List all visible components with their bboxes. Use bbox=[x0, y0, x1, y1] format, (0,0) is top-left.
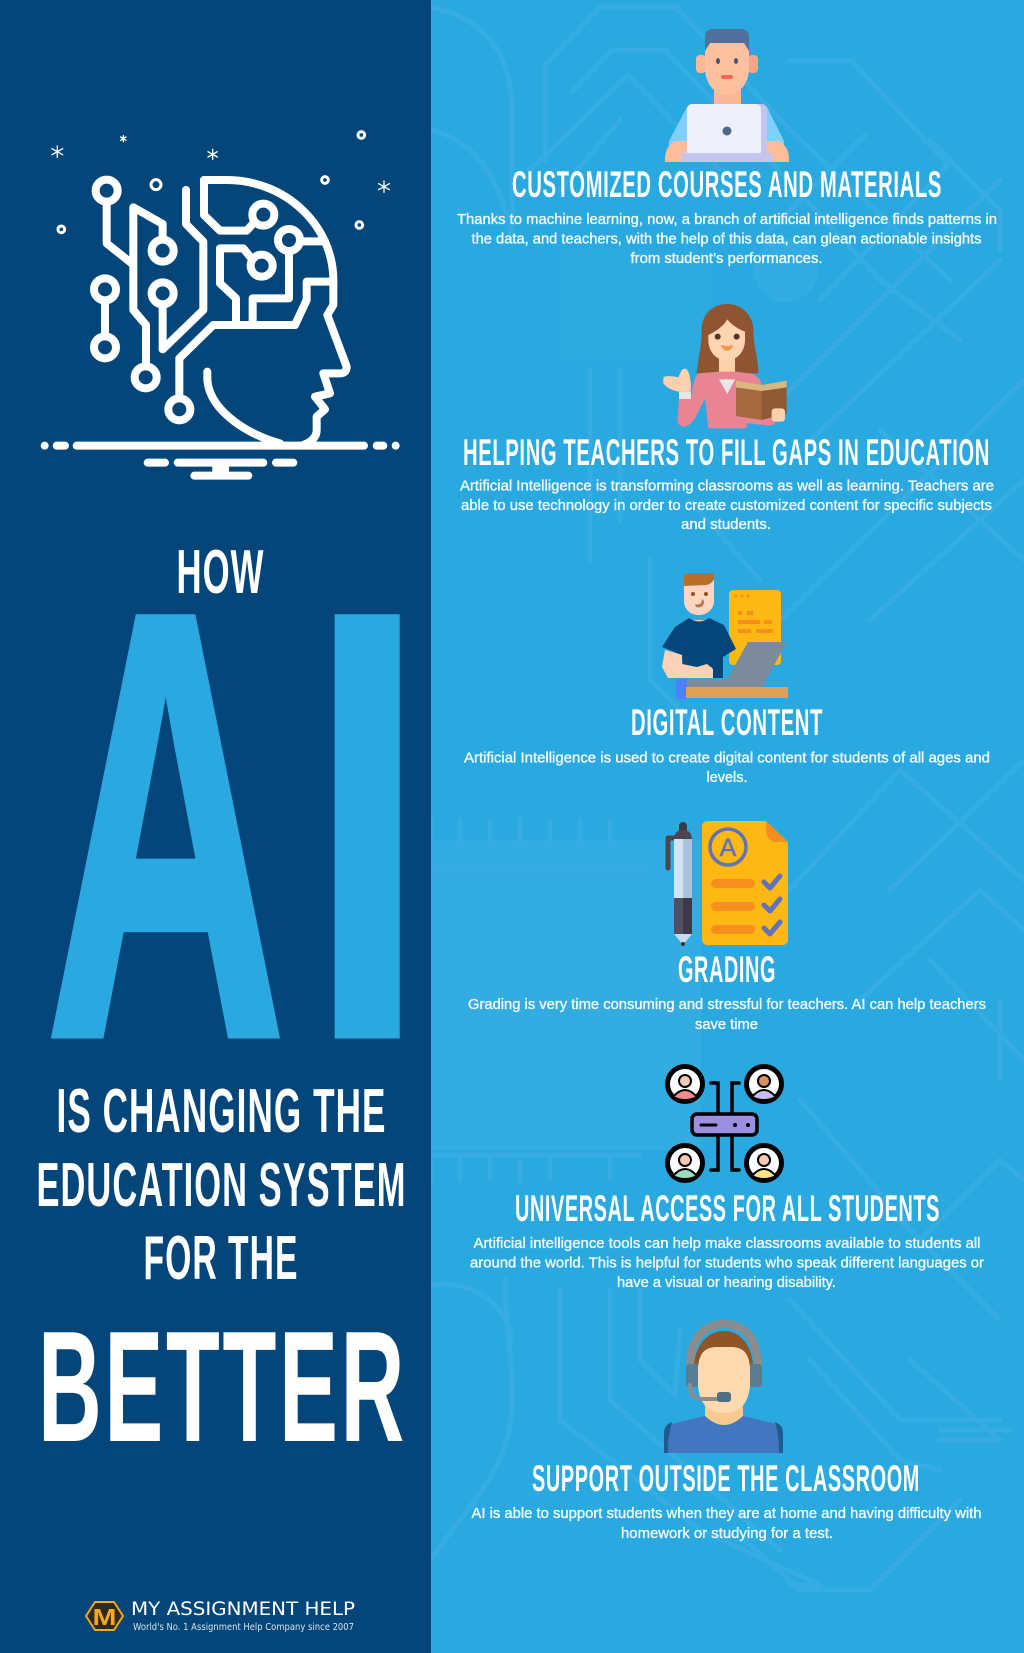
logo: My Assignment Help: MY ASSIGNMENT HELP bbox=[131, 1598, 355, 1620]
text block: Grading is very time consuming and stressful for teachers. AI can help teachers bbox=[468, 996, 986, 1013]
icon: teacher with book bbox=[663, 304, 787, 428]
text block: levels. bbox=[706, 769, 748, 786]
icon: pen and graded paper: A bbox=[720, 834, 737, 862]
text block bbox=[468, 996, 986, 1033]
section: universal access bbox=[470, 1066, 984, 1291]
text block: around the world. This is helpful for students who speak different languages or bbox=[470, 1254, 984, 1272]
heading: is changing the education system for the: FOR THE bbox=[144, 1224, 298, 1293]
text block: Thanks to machine learning, now, a branch of artificial intelligence finds patterns in bbox=[457, 211, 997, 228]
text block bbox=[460, 478, 994, 533]
icon: hexagon M: M bbox=[92, 1604, 116, 1630]
icon: AI head with circuits bbox=[41, 132, 400, 476]
text block: Artificial intelligence tools can help make classrooms available to students all bbox=[474, 1235, 980, 1252]
heading: HOW: HOW bbox=[176, 538, 264, 607]
icon: man at laptop with document bbox=[662, 573, 788, 699]
text block: have a visual or hearing disability. bbox=[617, 1274, 836, 1291]
text block: able to use technology in order to create customized content for specific subjects bbox=[461, 497, 992, 514]
title: GRADING bbox=[678, 949, 776, 990]
text block: homework or studying for a test. bbox=[621, 1525, 833, 1542]
text block: Artificial Intelligence is transforming classrooms as well as learning. Teachers are bbox=[460, 478, 994, 494]
icon: agent with headset bbox=[664, 1324, 783, 1453]
section: grading bbox=[468, 821, 986, 1033]
text block: and students. bbox=[681, 516, 771, 533]
text block: the data, and teachers, with the help of this data, can glean actionable insights bbox=[472, 230, 982, 248]
section: digital content bbox=[464, 573, 990, 786]
text block: from student’s performances. bbox=[630, 250, 822, 267]
text block: Artificial Intelligence is used to create digital content for students of all ages and bbox=[464, 750, 990, 766]
logo: My Assignment Help: World's No. 1 Assignment Help Company since 2007 bbox=[133, 1622, 354, 1633]
heading: is changing the education system for the: IS CHANGING THE bbox=[56, 1077, 386, 1146]
section: support outside classroom bbox=[472, 1324, 982, 1542]
icon: man with laptop bbox=[665, 29, 789, 162]
icon: hexagon M bbox=[86, 1602, 123, 1630]
section: customized courses bbox=[457, 29, 997, 267]
heading: AI: I bbox=[310, 488, 425, 1164]
text block bbox=[457, 211, 997, 267]
logo: My Assignment Help bbox=[86, 1598, 355, 1633]
heading: AI: A bbox=[46, 488, 286, 1164]
heading: is changing the education system for the bbox=[36, 1077, 406, 1293]
title: DIGITAL CONTENT bbox=[631, 702, 823, 743]
text block bbox=[464, 750, 990, 786]
icon: pen and graded paper bbox=[668, 821, 788, 946]
panel: right background bbox=[431, 0, 1024, 1653]
section: helping teachers bbox=[460, 304, 994, 533]
text block bbox=[472, 1505, 982, 1542]
text block bbox=[470, 1235, 984, 1291]
panel: left column bbox=[0, 0, 431, 1653]
icon: connected students network bbox=[668, 1066, 782, 1180]
heading: is changing the education system for the: EDUCATION SYSTEM bbox=[36, 1151, 406, 1220]
text block: AI is able to support students when they are at home and having difficulty with bbox=[472, 1505, 982, 1522]
text block: save time bbox=[695, 1016, 758, 1033]
heading: BETTER: BETTER bbox=[38, 1299, 407, 1475]
